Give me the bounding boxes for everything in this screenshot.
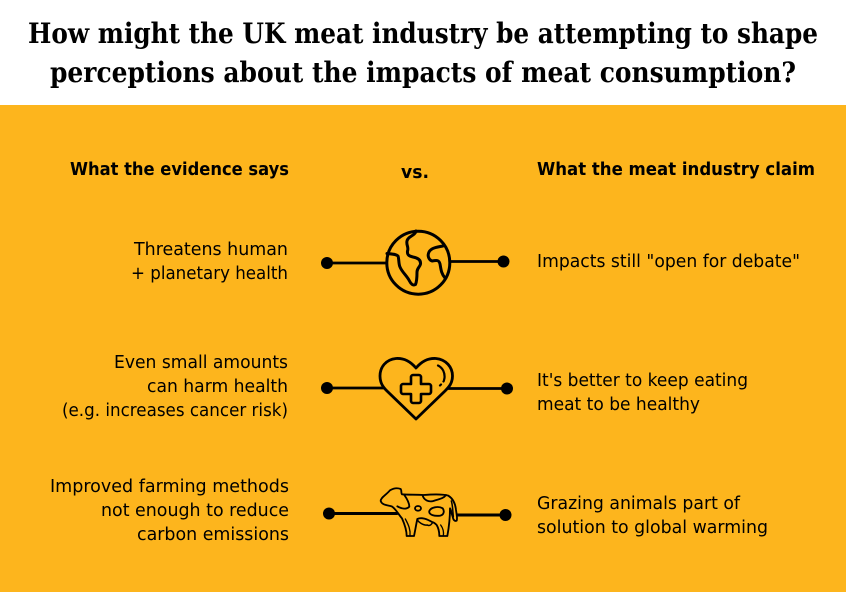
heading: evidence column: What the evidence says bbox=[70, 160, 289, 180]
claim: grazing animals: solution to global warming bbox=[537, 517, 768, 538]
text: evidence on small amounts bbox=[62, 352, 288, 421]
connector and icon: cow bbox=[323, 488, 512, 536]
text: evidence on farming methods bbox=[50, 476, 289, 545]
claim: grazing animals: Grazing animals part of bbox=[537, 493, 741, 514]
text: evidence on farming methods: not enough to reduce bbox=[101, 500, 289, 521]
text: evidence on human and planetary health bbox=[131, 239, 288, 284]
text: evidence on small amounts: can harm health bbox=[147, 376, 288, 397]
heading: vs.: vs. bbox=[401, 163, 429, 183]
text: evidence on farming methods: Improved farming methods bbox=[50, 476, 289, 497]
claim: keep eating meat bbox=[537, 370, 748, 415]
connector and icon: globe bbox=[321, 231, 510, 294]
claim: open for debate: Impacts still "open for debate" bbox=[537, 251, 800, 272]
claim: grazing animals bbox=[537, 493, 768, 538]
heading: industry column: What the meat industry claim bbox=[537, 160, 815, 180]
connector and icon: heart with cross bbox=[321, 358, 513, 419]
text: evidence on human and planetary health: Threatens human bbox=[133, 239, 288, 260]
claim: keep eating meat: It's better to keep eating bbox=[537, 370, 748, 391]
text: evidence on small amounts: (e.g. increases cancer risk) bbox=[62, 400, 288, 421]
text: evidence on farming methods: carbon emissions bbox=[137, 524, 289, 545]
title bbox=[28, 17, 818, 89]
claim: keep eating meat: meat to be healthy bbox=[537, 394, 700, 415]
text: evidence on human and planetary health: + planetary health bbox=[131, 263, 288, 284]
text: evidence on small amounts: Even small amounts bbox=[114, 352, 288, 373]
